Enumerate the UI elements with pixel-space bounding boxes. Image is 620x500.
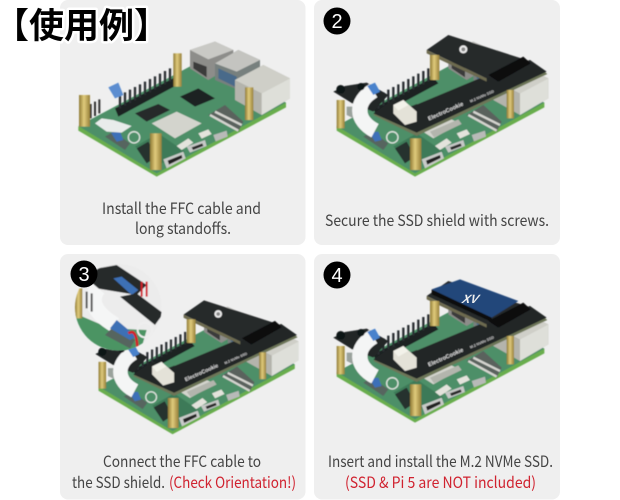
step 1 caption: Install the FFC cable and <box>102 197 261 219</box>
step 3 caption: the SSD shield. <box>72 471 165 493</box>
panel: step 2 <box>314 0 560 245</box>
step 1 board illustration <box>78 42 290 177</box>
step 4 caption: (SSD & Pi 5 are NOT included) <box>345 471 536 493</box>
step 2 board illustration <box>333 35 548 177</box>
badge: 4: 4 <box>331 265 343 287</box>
step 3 board illustration <box>95 300 299 434</box>
badge: 4 <box>324 262 350 288</box>
badge: 3: 3 <box>78 264 90 286</box>
step 3 caption: (Check Orientation!) <box>169 471 296 493</box>
step 4 board illustration <box>333 279 548 423</box>
badge: 3 <box>70 260 98 288</box>
panel: step 1 <box>60 0 306 245</box>
badge: 2: 2 <box>331 11 343 33</box>
step 3 caption: Connect the FFC cable to <box>103 450 261 472</box>
inset: connector close-up <box>75 264 163 353</box>
step 4 caption: Insert and install the M.2 NVMe SSD. <box>328 450 553 472</box>
panel: step 4 <box>314 254 560 500</box>
badge: 2 <box>324 8 350 34</box>
step 2 caption: Secure the SSD shield with screws. <box>325 209 549 231</box>
SSD label: XV <box>460 293 482 306</box>
step 1 caption: long standoffs. <box>135 217 231 239</box>
panel: step 3 <box>60 254 306 500</box>
